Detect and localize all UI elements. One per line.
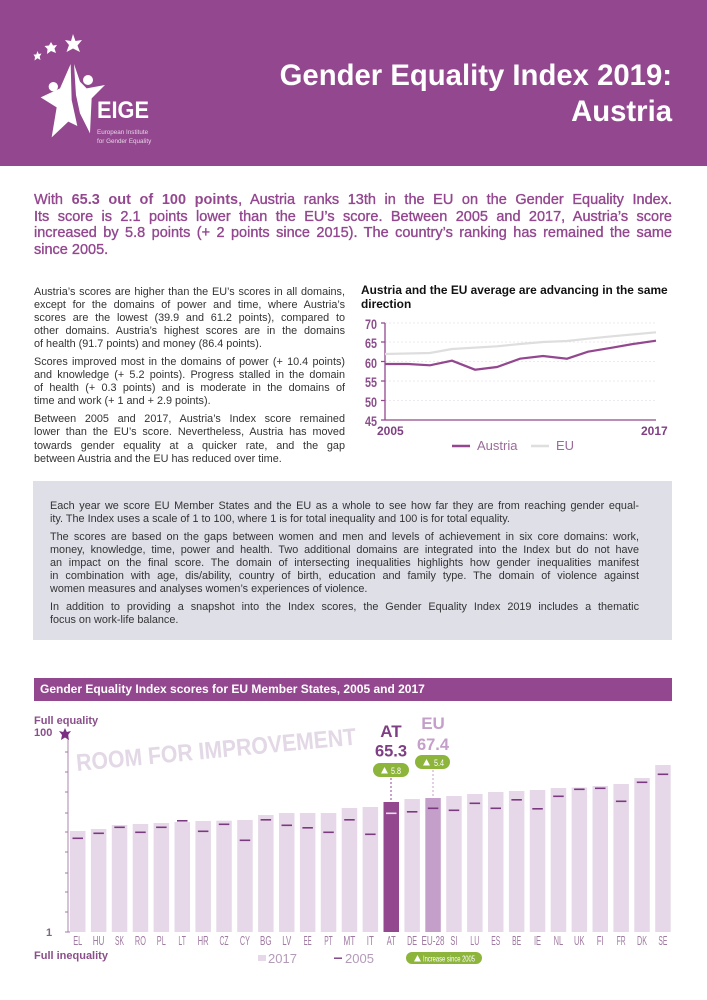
- text block: domain scores and progress: scores are the lowest (39.9 and 61.2 points), compared to: [34, 312, 345, 324]
- heading band: scores chart: [34, 678, 672, 701]
- axis caption top: 100: [34, 727, 52, 739]
- markers 2005: [72, 774, 668, 841]
- text block: about the index: The scores are based on the gaps between women and men and levels of achievement in six core domains: work,: [50, 530, 639, 542]
- text block: domain scores and progress: [34, 286, 346, 464]
- country labels: BE: [512, 934, 521, 948]
- callout: Austria score: 5.8: [391, 766, 401, 776]
- title: Gender Equality Index 2019:: [280, 59, 672, 92]
- country labels: DK: [637, 934, 647, 948]
- axis caption top: [34, 715, 99, 739]
- chart x labels: 2005: [377, 424, 404, 438]
- country labels: UK: [574, 934, 585, 948]
- lead paragraph: [34, 192, 672, 258]
- icon: EIGE logo: European Institute: [97, 129, 149, 136]
- text block: about the index: focus on work-life balance.: [50, 614, 178, 626]
- line chart title: [361, 283, 668, 311]
- callout: EU score: [415, 714, 450, 798]
- text block: about the index: money, knowledge, time, power and health. Two additional domains are integrated into the Index but do not have: [50, 544, 639, 556]
- chart y labels: 45: [365, 414, 377, 429]
- chart legend: 2017: [268, 951, 297, 966]
- chart x labels: [377, 424, 668, 438]
- chart y labels: 65: [365, 336, 377, 351]
- lead paragraph: since 2005.: [34, 242, 108, 258]
- chart axes: [381, 323, 656, 420]
- chart y labels: 60: [365, 356, 377, 371]
- bars 2017: [70, 765, 671, 932]
- chart y labels: 55: [365, 375, 377, 390]
- icon: EIGE logo: EIGE: [97, 97, 149, 124]
- title: Austria: [571, 95, 672, 128]
- country labels: AT: [387, 934, 396, 948]
- country labels: SK: [115, 934, 124, 948]
- text block: domain scores and progress: other domains. Austria’s highest scores are in the domains: [34, 324, 345, 336]
- country labels: EL: [73, 934, 82, 948]
- text block: about the index: In addition to providing a snapshot into the Index scores, the Gender Equality Index 2019 includes a thematic: [50, 601, 639, 613]
- text block: domain scores and progress: and knowledge (+ 5.2 points). Progress stalled in the domain: [34, 368, 345, 380]
- chart legend: 2005: [345, 951, 374, 966]
- text block: domain scores and progress: towards gender equality at a quicker rate, and the gap: [34, 440, 345, 452]
- axis caption bottom: Full inequality: [34, 950, 109, 962]
- text block: about the index: ity. The Index uses a scale of 1 to 100, where 1 is for total inequality and 100 is for total equality.: [50, 513, 510, 525]
- axis caption top: Full equality: [34, 715, 99, 727]
- text block: domain scores and progress: Austria’s scores are higher than the EU’s scores in all domains,: [34, 286, 345, 298]
- icon: EIGE logo: [34, 34, 152, 145]
- Austria line: [385, 341, 656, 370]
- panel: about the index: [33, 481, 672, 640]
- text block: domain scores and progress: lower than the EU’s score. Nevertheless, Austria has moved: [34, 426, 345, 438]
- panel: purple header band: [0, 0, 707, 166]
- text block: about the index: in combination with age, dis/ability, country of birth, education and family type. The domain of violence against: [50, 570, 639, 582]
- chart legend: [452, 438, 574, 453]
- callout: Austria score: AT: [380, 722, 402, 741]
- country labels: RO: [135, 934, 146, 948]
- country labels: LT: [178, 934, 186, 948]
- country labels: LV: [282, 934, 292, 948]
- chart legend: Increase since 2005: [423, 954, 475, 964]
- text block: domain scores and progress: Between 2005 and 2017, Austria’s Index score remained: [34, 412, 345, 424]
- text block: domain scores and progress: of health (91.7 points) and money (86.4 points).: [34, 338, 262, 350]
- chart x labels: 2017: [641, 424, 668, 438]
- country labels: FI: [597, 934, 604, 948]
- heading band: scores chart: Gender Equality Index scores for EU Member States, 2005 and 2017: [40, 682, 425, 696]
- country labels: CZ: [220, 934, 229, 948]
- chart legend: Austria: [477, 438, 518, 453]
- country labels: IT: [367, 934, 374, 948]
- chart legend: EU: [556, 438, 574, 453]
- room for improvement label: ROOM FOR IMPROVEMENT: [75, 724, 358, 777]
- country labels: FR: [617, 934, 626, 948]
- country labels: SE: [658, 934, 667, 948]
- country labels: PL: [157, 934, 166, 948]
- line chart title: direction: [361, 297, 411, 311]
- country labels: PT: [324, 934, 333, 948]
- country labels: HR: [198, 934, 209, 948]
- line chart title: Austria and the EU average are advancing in the same: [361, 283, 668, 297]
- EU line: [385, 332, 656, 354]
- country labels: [73, 934, 667, 948]
- callout: EU score: 5.4: [434, 758, 444, 768]
- country labels: SI: [450, 934, 457, 948]
- y axis: [65, 733, 70, 932]
- text block: domain scores and progress: Scores improved most in the domains of power (+ 10.4 points): [34, 356, 345, 368]
- country labels: NL: [554, 934, 563, 948]
- chart y labels: 70: [365, 317, 377, 332]
- axis caption bottom: [34, 927, 109, 962]
- line chart: [365, 317, 668, 453]
- country labels: LU: [470, 934, 479, 948]
- lead paragraph: With 65.3 out of 100 points, Austria ranks 13th in the EU on the Gender Equality Index.: [34, 192, 672, 208]
- chart y labels: [365, 317, 377, 429]
- text block: about the index: an impact on the final score. The domain of intersecting inequalities highlights how gender inequalities manifest: [50, 556, 639, 568]
- callout: EU score: EU: [421, 714, 445, 733]
- callout: Austria score: 65.3: [375, 742, 407, 760]
- country labels: EU-28: [422, 934, 445, 948]
- text block: domain scores and progress: except for the domains of power and time, where Austria’s: [34, 298, 345, 310]
- country labels: MT: [343, 934, 356, 948]
- text block: domain scores and progress: time and work (+ 1 and + 2.9 points).: [34, 394, 211, 406]
- bar chart: [34, 714, 671, 966]
- text block: domain scores and progress: of health (+ 0.3 points) and is moderate in the domains of: [34, 382, 345, 394]
- country labels: IE: [534, 934, 541, 948]
- chart legend: [258, 951, 482, 966]
- chart gridlines: [385, 323, 656, 400]
- text block: domain scores and progress: between Austria and the EU has reduced over time.: [34, 452, 282, 464]
- country labels: CY: [240, 934, 250, 948]
- text block: about the index: women measures and analyses women’s experiences of violence.: [50, 582, 367, 594]
- icon: full equality star: [59, 728, 71, 740]
- callout: Austria score: [373, 722, 409, 802]
- axis caption bottom: 1: [46, 927, 52, 939]
- country labels: ES: [491, 934, 500, 948]
- chart y labels: 50: [365, 395, 377, 410]
- country labels: DE: [407, 934, 417, 948]
- callout: EU score: 67.4: [417, 736, 450, 754]
- title: [280, 59, 672, 128]
- lead paragraph: Its score is 2.1 points lower than the EU’s score. Between 2005 and 2017, Austria’s score: [34, 208, 672, 224]
- country labels: HU: [93, 934, 104, 948]
- text block: about the index: [50, 500, 639, 626]
- country labels: EE: [304, 934, 312, 948]
- icon: EIGE logo: for Gender Equality: [97, 138, 152, 145]
- country labels: BG: [260, 934, 272, 948]
- text block: about the index: Each year we score EU Member States and the EU as a whole to see how far they are from reaching gender equal-: [50, 500, 639, 512]
- lead paragraph: increased by 5.8 points (+ 2 points since 2015). The country’s ranking has remained the same: [34, 225, 672, 241]
